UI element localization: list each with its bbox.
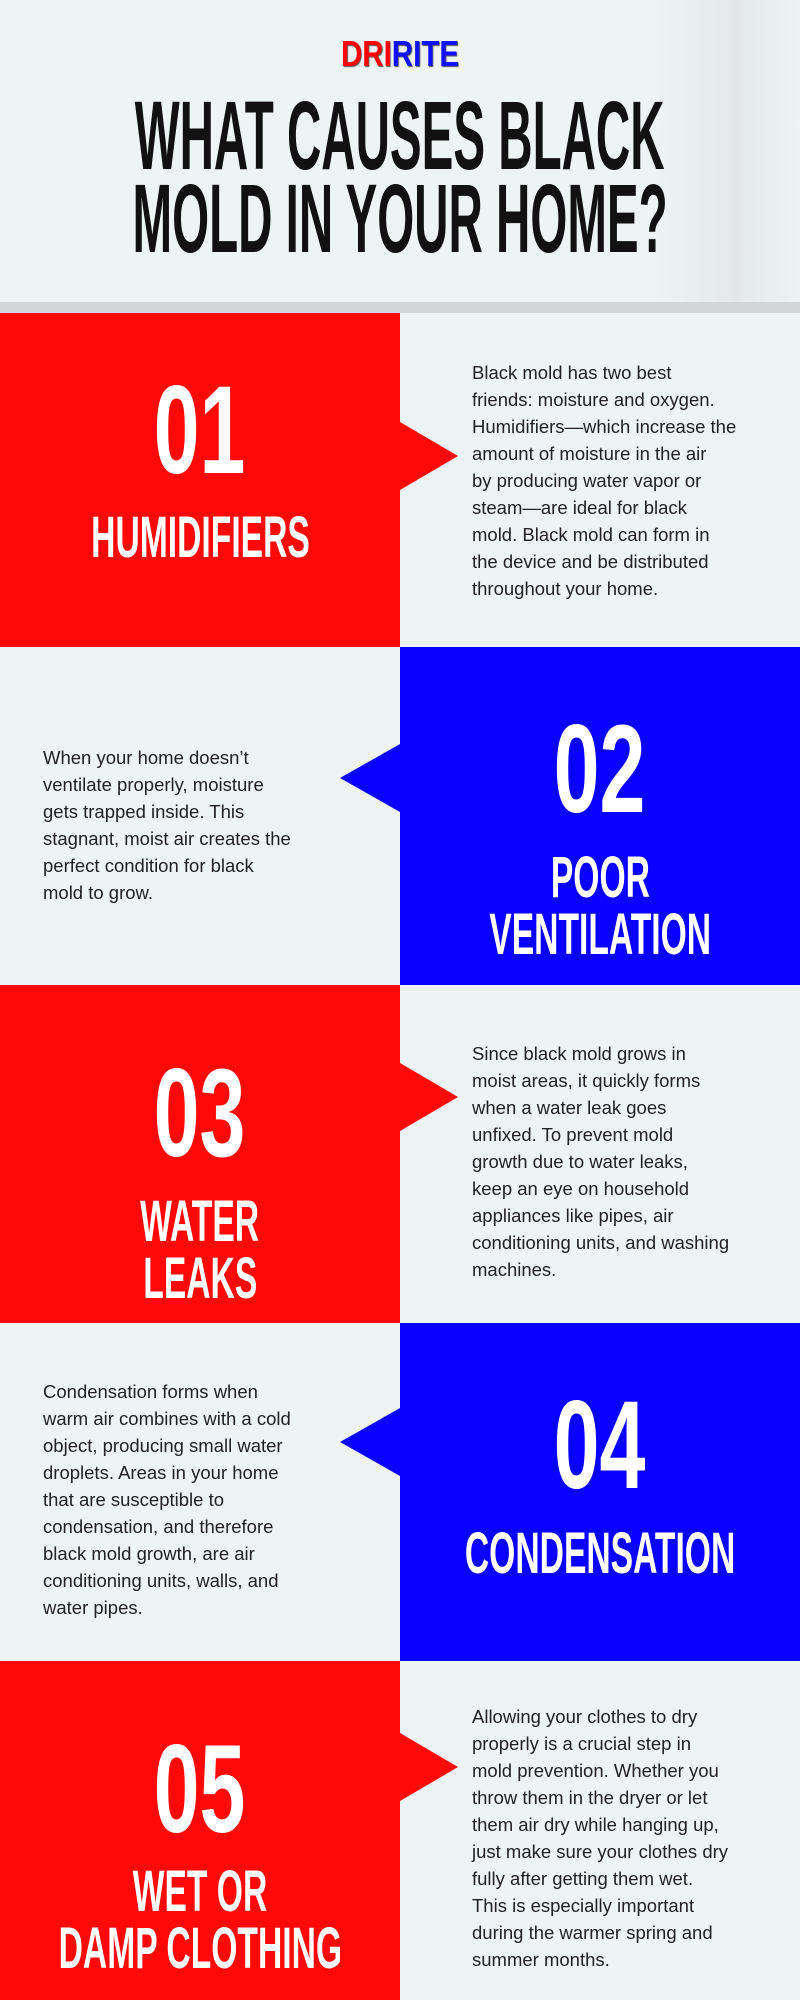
- heading water leaks: [140, 1189, 259, 1311]
- text block: Allowing your clothes to dry: [472, 1706, 697, 1727]
- text block: perfect condition for black: [43, 855, 254, 876]
- text block: [472, 1043, 729, 1280]
- text block: growth due to water leaks,: [472, 1151, 688, 1172]
- panel: 04 condensation: [0, 1323, 800, 1661]
- text block: [43, 747, 291, 903]
- text block: conditioning units, walls, and: [43, 1570, 279, 1591]
- text block: warm air combines with a cold: [43, 1408, 291, 1429]
- header: [0, 0, 800, 302]
- text block: amount of moisture in the air: [472, 443, 706, 464]
- heading water leaks: WATER: [141, 1189, 259, 1254]
- title: WHAT CAUSES BLACK: [135, 81, 665, 190]
- logo: DRIRITE: [341, 33, 459, 74]
- text block: appliances like pipes, air: [472, 1205, 674, 1226]
- heading humidifiers: HUMIDIFIERS: [91, 505, 309, 570]
- text block: by producing water vapor or: [472, 470, 701, 491]
- title: [132, 81, 668, 273]
- text block: mold prevention. Whether you: [472, 1760, 719, 1781]
- text block: Condensation forms when: [43, 1381, 258, 1402]
- text block: steam—are ideal for black: [472, 497, 687, 518]
- text block: throw them in the dryer or let: [472, 1787, 707, 1808]
- text block: properly is a crucial step in: [472, 1733, 691, 1754]
- text block: when a water leak goes: [472, 1097, 666, 1118]
- blue block: [400, 1323, 800, 1661]
- text block: keep an eye on household: [472, 1178, 689, 1199]
- text block: [43, 1381, 291, 1618]
- heading wet or damp clothing: WET OR: [133, 1859, 267, 1924]
- text block: Black mold has two best: [472, 362, 671, 383]
- text block: ventilate properly, moisture: [43, 774, 264, 795]
- heading wet or damp clothing: DAMP CLOTHING: [58, 1916, 342, 1981]
- text block: [472, 1706, 728, 1970]
- title: MOLD IN YOUR HOME?: [132, 164, 668, 273]
- heading condensation: CONDENSATION: [465, 1521, 735, 1586]
- red block: [0, 1661, 400, 2000]
- number 01: 01: [154, 361, 246, 500]
- number 04: 04: [554, 1376, 646, 1515]
- arrow: [340, 744, 400, 812]
- text block: gets trapped inside. This: [43, 801, 244, 822]
- arrow: [340, 1408, 400, 1476]
- text block: object, producing small water: [43, 1435, 283, 1456]
- panel: 05 wet or damp clothing: [0, 1661, 800, 2000]
- text block: When your home doesn’t: [43, 747, 249, 768]
- number 03: 03: [154, 1044, 246, 1183]
- text block: throughout your home.: [472, 578, 658, 599]
- text block: them air dry while hanging up,: [472, 1814, 719, 1835]
- panel: 02 poor ventilation: [0, 647, 800, 985]
- heading poor ventilation: [489, 845, 711, 967]
- text block: black mold growth, are air: [43, 1543, 255, 1564]
- panel: 01 humidifiers: [0, 313, 800, 647]
- text block: mold. Black mold can form in: [472, 524, 710, 545]
- text block: [472, 362, 736, 599]
- text block: summer months.: [472, 1949, 610, 1970]
- text block: during the warmer spring and: [472, 1922, 713, 1943]
- text block: friends: moisture and oxygen.: [472, 389, 715, 410]
- text block: Since black mold grows in: [472, 1043, 686, 1064]
- text block: unfixed. To prevent mold: [472, 1124, 673, 1145]
- text block: that are susceptible to: [43, 1489, 224, 1510]
- text block: moist areas, it quickly forms: [472, 1070, 700, 1091]
- arrow: [400, 1063, 458, 1131]
- text block: just make sure your clothes dry: [472, 1841, 728, 1862]
- text block: This is especially important: [472, 1895, 694, 1916]
- text block: conditioning units, and washing: [472, 1232, 729, 1253]
- number 05: 05: [154, 1720, 246, 1859]
- heading poor ventilation: VENTILATION: [489, 902, 711, 967]
- arrow: [400, 422, 458, 490]
- text block: droplets. Areas in your home: [43, 1462, 278, 1483]
- heading poor ventilation: POOR: [550, 845, 650, 910]
- red block: [0, 313, 400, 647]
- text block: Humidifiers—which increase the: [472, 416, 736, 437]
- number 02: 02: [554, 700, 646, 839]
- heading water leaks: LEAKS: [143, 1246, 257, 1311]
- text block: fully after getting them wet.: [472, 1868, 693, 1889]
- text block: stagnant, moist air creates the: [43, 828, 291, 849]
- text block: the device and be distributed: [472, 551, 709, 572]
- text block: water pipes.: [43, 1597, 143, 1618]
- text block: machines.: [472, 1259, 556, 1280]
- arrow: [400, 1733, 458, 1801]
- red block: [0, 985, 400, 1323]
- panel: 03 water leaks: [0, 985, 800, 1323]
- text block: condensation, and therefore: [43, 1516, 273, 1537]
- blue block: [400, 647, 800, 985]
- heading wet or damp clothing: [58, 1859, 342, 1981]
- text block: mold to grow.: [43, 882, 153, 903]
